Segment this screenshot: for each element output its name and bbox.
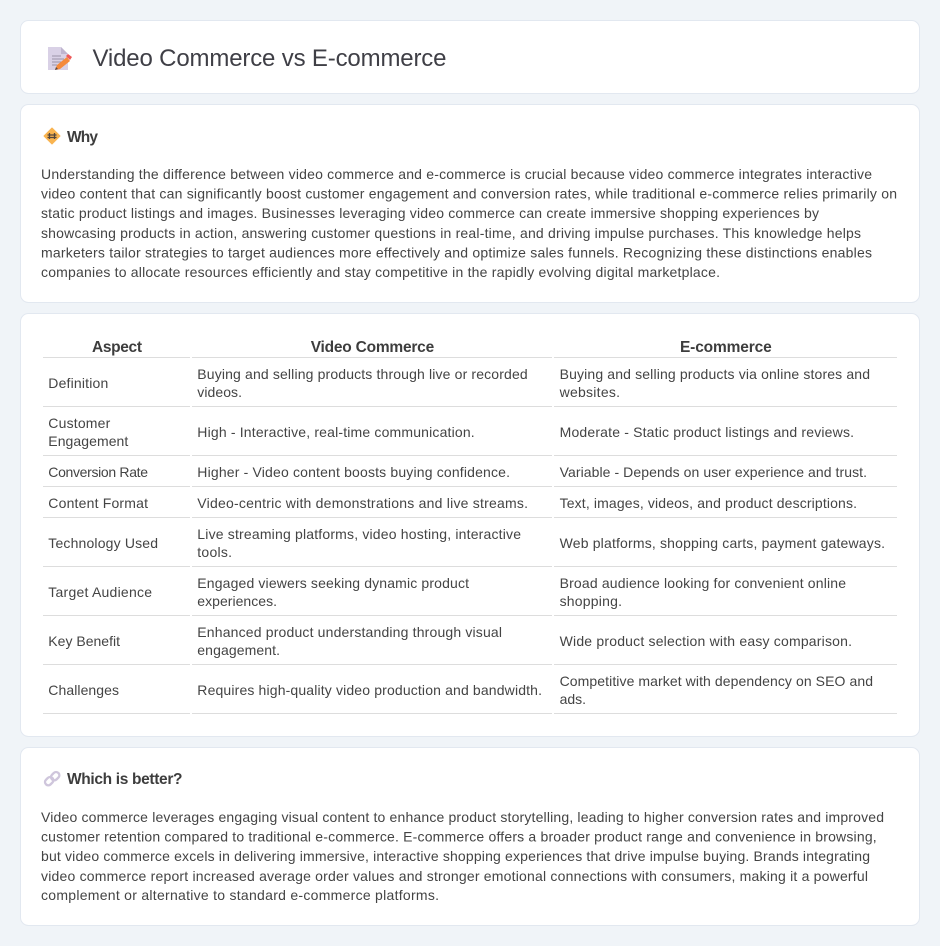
row: challenges: ads. (560, 691, 586, 707)
panel: which is better (20, 748, 920, 926)
row: target audience: Engaged viewers seeking dynamic product (197, 575, 469, 591)
row: technology used: Technology Used (48, 535, 158, 551)
panel: title header (20, 20, 920, 94)
row: target audience (48, 575, 846, 609)
row: key benefit: Wide product selection with easy comparison. (560, 633, 852, 649)
text block: why paragraph: marketers tailor strategies to target audiences more effectively and optimize sales funnels. Recognizing these distinctions enables (41, 244, 872, 260)
row: customer engagement (48, 415, 854, 449)
row: customer engagement: Engagement (48, 433, 128, 449)
row: technology used: tools. (197, 544, 232, 560)
text block: which is better paragraph: but video commerce excels in delivering immersive, interactive shopping experiences that drive impulse buying. Brands integrating (41, 848, 870, 864)
row: conversion rate: Variable - Depends on user experience and trust. (560, 464, 867, 480)
row: content format: Content Format (48, 495, 148, 511)
row: challenges: Competitive market with dependency on SEO and (560, 673, 873, 689)
table header: E-commerce (680, 339, 772, 356)
row: conversion rate: Conversion Rate (48, 464, 148, 480)
icon: memo with pencil (48, 47, 72, 70)
row: target audience: Broad audience looking for convenient online (560, 575, 846, 591)
row: conversion rate (48, 464, 867, 480)
row: target audience: Target Audience (48, 584, 152, 600)
row: customer engagement: High - Interactive, real-time communication. (197, 424, 475, 440)
row: customer engagement: Customer (48, 415, 111, 431)
text block: why paragraph: companies to allocate resources efficiently and stay competitive in the rapidly evolving digital marketplace. (41, 264, 720, 280)
row: content format: Text, images, videos, and product descriptions. (560, 495, 857, 511)
table header (92, 339, 772, 356)
row: key benefit: engagement. (197, 642, 280, 658)
table header: Video Commerce (311, 339, 435, 356)
text block: which is better paragraph: video commerce report increased average order values and stronger emotional connections with consumers, making it a powerful (41, 868, 868, 884)
row: definition: Buying and selling products via online stores and (560, 366, 870, 382)
row: technology used: Live streaming platforms, video hosting, interactive (197, 526, 521, 542)
panel: why (20, 104, 920, 302)
text block: why paragraph (41, 166, 897, 280)
text block: why paragraph: static product listings and images. Businesses leveraging video commerce can create immersive shopping experiences by (41, 205, 819, 221)
row: definition: Buying and selling products through live or recorded (197, 366, 528, 382)
row: definition: websites. (559, 384, 620, 400)
row: definition: videos. (197, 384, 242, 400)
row: key benefit (48, 624, 852, 658)
table header: Aspect (92, 339, 142, 356)
text block: which is better paragraph: Video commerce leverages engaging visual content to enhance product storytelling, leading to higher conversion rates and improved (41, 809, 884, 825)
title: Video Commerce vs E-commerce (92, 45, 446, 72)
row: challenges: Challenges (48, 682, 119, 698)
row: target audience: shopping. (560, 593, 622, 609)
row: target audience: experiences. (197, 593, 277, 609)
row: key benefit: Enhanced product understanding through visual (197, 624, 502, 640)
row: customer engagement: Moderate - Static product listings and reviews. (560, 424, 854, 440)
text block: why paragraph: Understanding the difference between video commerce and e-commerce is crucial because video commerce integrates interactive (41, 166, 872, 182)
row: technology used: Web platforms, shopping carts, payment gateways. (560, 535, 885, 551)
row: technology used (48, 526, 885, 560)
row: challenges (48, 673, 873, 707)
text block: which is better paragraph: complement or alternative to standard e-commerce platforms. (41, 887, 439, 903)
text block: which is better paragraph (41, 809, 884, 903)
icon: link chain (44, 771, 61, 787)
text block: why paragraph: video content that can significantly boost customer engagement and conversion rates, while traditional e-commerce relies primarily on (41, 186, 897, 202)
row: challenges: Requires high-quality video production and bandwidth. (197, 682, 542, 698)
heading: why: Why (67, 129, 98, 146)
row: definition: Definition (48, 375, 108, 391)
text block: which is better paragraph: customer retention compared to traditional e-commerce. E-commerce offers a broader product range and convenience in browsing, (41, 829, 877, 845)
row: content format: Video-centric with demonstrations and live streams. (197, 495, 528, 511)
row: key benefit: Key Benefit (48, 633, 120, 649)
text block: why paragraph: showcasing products in action, answering customer questions in real-time, and driving impulse purchases. This knowledge helps (41, 225, 861, 241)
heading: which is better: Which is better? (67, 771, 182, 788)
icon: warning diamond (44, 128, 60, 144)
row: content format (48, 495, 857, 511)
row: conversion rate: Higher - Video content boosts buying confidence. (197, 464, 510, 480)
row: definition (48, 366, 870, 400)
panel: comparison table (20, 314, 920, 736)
